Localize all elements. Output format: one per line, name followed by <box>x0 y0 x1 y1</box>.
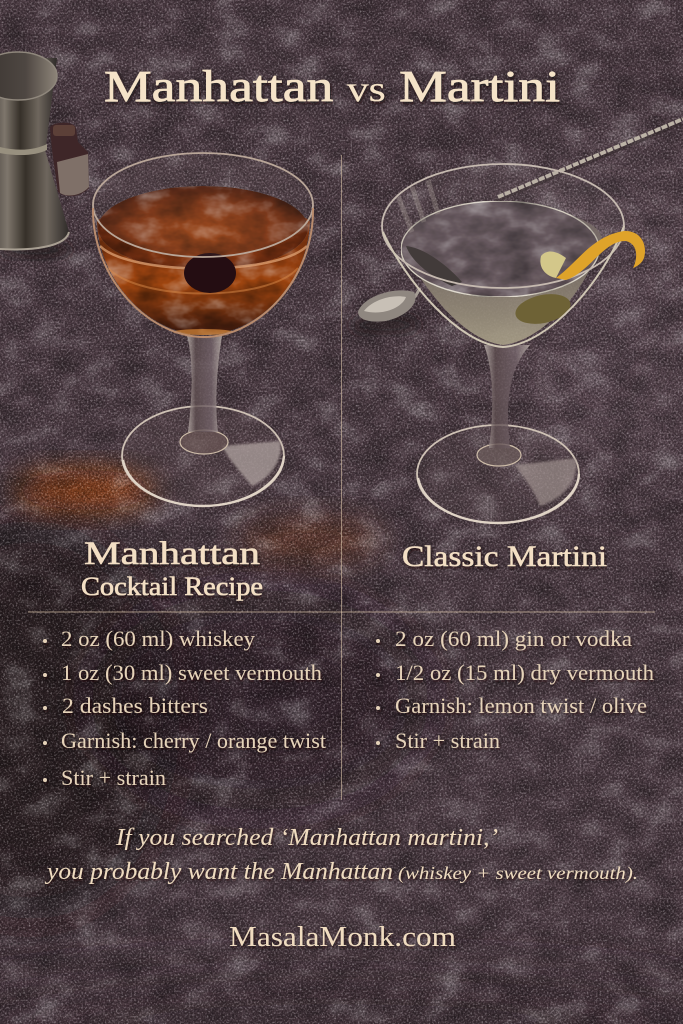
illustration: Martini glass <box>382 164 645 523</box>
note: search hint: If you searched ‘Manhattan martini,’ <box>115 825 498 851</box>
liquid: whiskey <box>97 186 310 335</box>
liquid: martini <box>402 208 602 345</box>
heading: Manhattan: Manhattan <box>84 536 260 572</box>
submerged spoon shadow <box>406 246 462 286</box>
list: Martini ingredients <box>376 626 654 753</box>
list: Martini ingredients: Garnish: lemon twist / olive <box>395 693 647 718</box>
icon: jigger <box>0 52 73 259</box>
footer: website: MasalaMonk.com <box>229 922 456 953</box>
list: Manhattan ingredients: 2 dashes bitters <box>62 693 208 718</box>
list: Manhattan ingredients: Stir + strain <box>61 765 166 790</box>
heading: Manhattan <box>81 536 263 601</box>
liquid surface <box>401 201 599 297</box>
list: Martini ingredients: 2 oz (60 ml) gin or vodka <box>395 626 632 651</box>
list: Manhattan ingredients: Garnish: cherry / orange twist <box>61 728 326 753</box>
list: Manhattan ingredients: 1 oz (30 ml) sweet vermouth <box>61 660 322 685</box>
list: Martini ingredients: 1/2 oz (15 ml) dry vermouth <box>395 660 654 685</box>
note: search hint: (whiskey + sweet vermouth). <box>398 863 638 884</box>
glass foot <box>122 406 284 506</box>
glass rim <box>93 153 313 337</box>
heading: Classic Martini: Classic Martini <box>402 540 607 573</box>
glass foot <box>417 425 579 523</box>
note: search hint <box>45 825 638 885</box>
divider: horizontal <box>28 611 655 613</box>
list: Manhattan ingredients <box>43 626 326 790</box>
glass stem <box>484 345 530 448</box>
garnish: lemon twist <box>540 231 645 280</box>
list: Martini ingredients: Stir + strain <box>395 728 500 753</box>
title: Manhattan vs Martini <box>104 62 560 111</box>
icon: bar spoon <box>349 119 683 335</box>
list: Manhattan ingredients: 2 oz (60 ml) whiskey <box>61 626 255 651</box>
garnish: olive <box>513 289 573 329</box>
divider: vertical <box>340 155 342 800</box>
icon: bitters bottle <box>50 123 89 196</box>
garnish: cherry <box>184 253 236 293</box>
illustration: Manhattan coupe glass <box>93 153 313 506</box>
glass stem <box>187 336 222 432</box>
glass rim <box>382 164 624 347</box>
note: search hint: you probably want the Manhattan <box>45 859 393 885</box>
subheading: Cocktail Recipe: Cocktail Recipe <box>81 572 263 601</box>
